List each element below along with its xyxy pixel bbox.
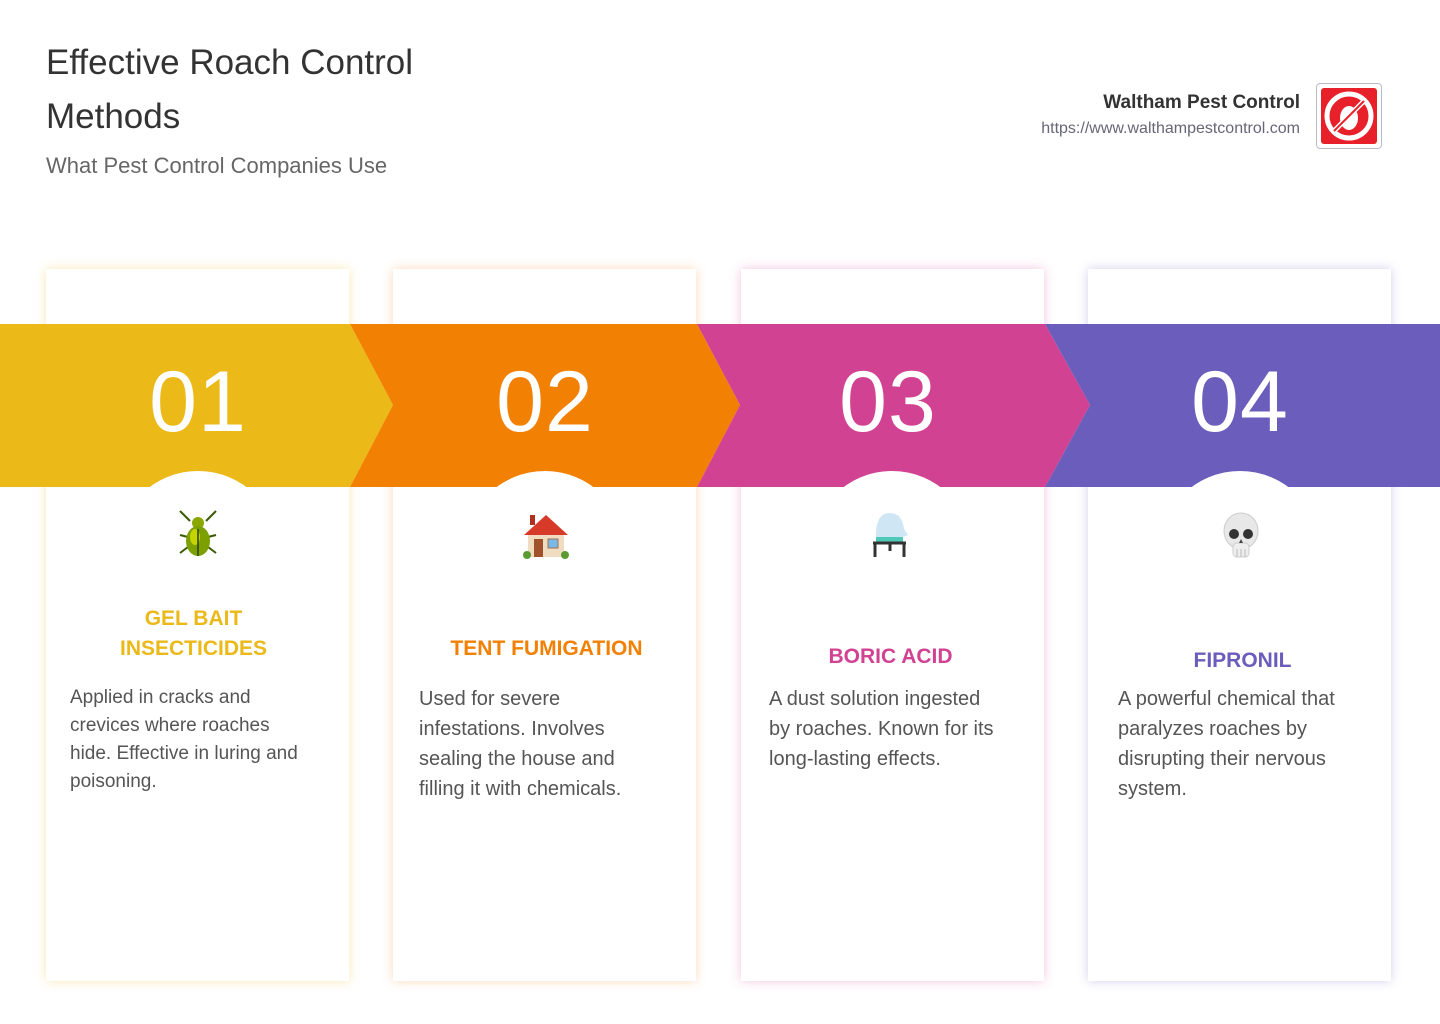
logo — [1316, 83, 1382, 149]
brand url: https://www.walthampestcontrol.com — [1041, 120, 1300, 137]
heading 4: FIPRONIL — [1194, 649, 1292, 672]
brand block — [1041, 83, 1382, 149]
number 01: 01 — [149, 354, 247, 450]
heading 1: INSECTICIDES — [120, 637, 267, 660]
brand name: Waltham Pest Control — [1103, 92, 1300, 113]
text 2: Used for severe infestations. Involves sealing the house and filling it with chemicals. — [419, 688, 621, 800]
heading 2: TENT FUMIGATION — [450, 637, 643, 660]
icon: house — [523, 515, 569, 559]
number 04: 04 — [1191, 354, 1289, 450]
title: Methods — [46, 97, 180, 136]
text 1: Applied in cracks and crevices where roaches hide. Effective in luring and poisoning. — [70, 687, 298, 792]
icon: skull — [1224, 512, 1258, 558]
subtitle: What Pest Control Companies Use — [46, 153, 387, 178]
icon: beetle — [179, 510, 217, 556]
title — [46, 43, 413, 136]
title: Effective Roach Control — [46, 43, 413, 82]
card 3 — [741, 269, 1044, 981]
number 03: 03 — [839, 354, 937, 450]
icon: flask — [873, 513, 908, 557]
heading 1: GEL BAIT — [145, 607, 242, 630]
heading 3: BORIC ACID — [828, 645, 953, 668]
card 1 — [46, 269, 349, 981]
text 3: A dust solution ingested by roaches. Known for its long-lasting effects. — [769, 688, 994, 770]
heading 1 — [120, 607, 267, 660]
card 2 — [393, 269, 696, 981]
number 02: 02 — [496, 354, 594, 450]
text 4: A powerful chemical that paralyzes roaches by disrupting their nervous system. — [1118, 688, 1335, 800]
card 4 — [1088, 269, 1391, 981]
